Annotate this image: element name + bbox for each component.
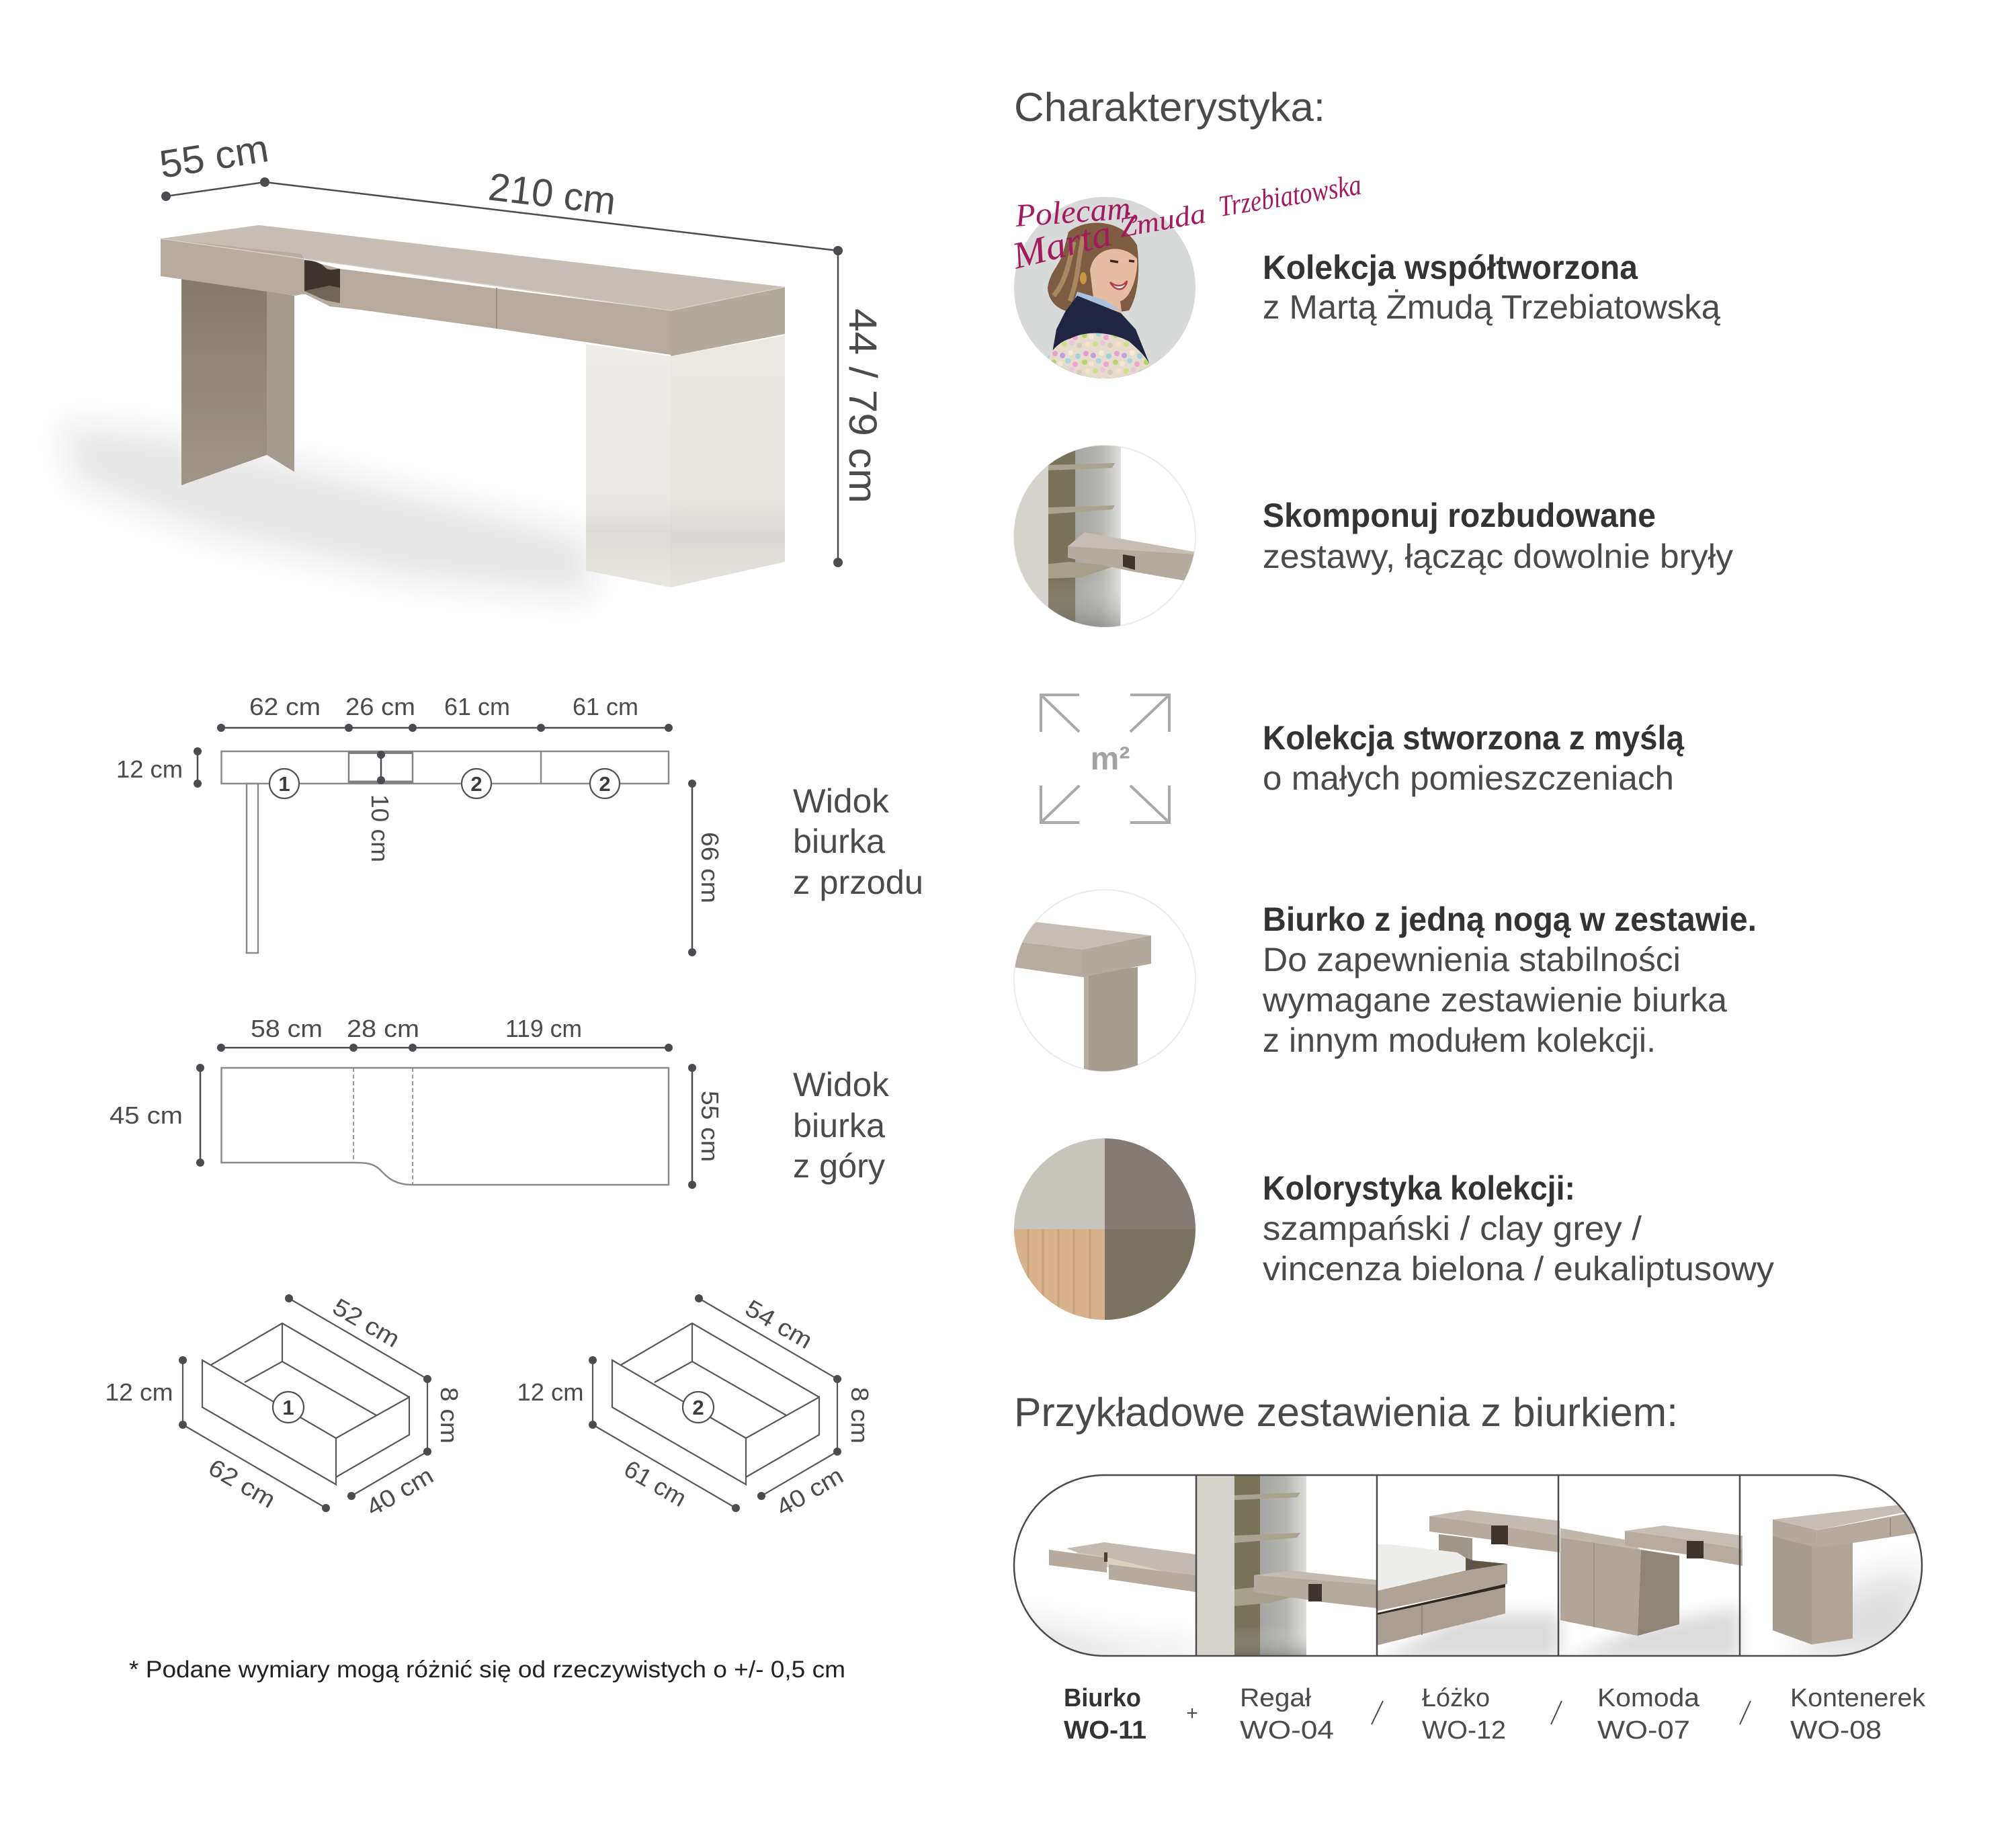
desk top <box>161 225 785 356</box>
drawer dimension lines <box>589 1294 841 1512</box>
top view labels: 119 cm <box>505 1015 582 1042</box>
caption: front view <box>793 782 923 901</box>
text: small rooms <box>1263 719 1685 797</box>
text: collaboration <box>1263 249 1720 326</box>
eyes <box>1110 261 1134 262</box>
drawer badge: 2 <box>692 1396 704 1419</box>
panel: container <box>1773 1505 1922 1660</box>
caption: front view: Widok <box>793 782 890 820</box>
drawer 2 diagram <box>517 1294 874 1521</box>
top view labels: 28 cm <box>347 1015 419 1042</box>
label: Regał <box>1240 1684 1334 1745</box>
width labels: 61 cm <box>444 693 510 720</box>
text: compose sets: Skomponuj rozbudowane <box>1263 497 1656 534</box>
label: Kontenerek <box>1790 1684 1926 1745</box>
drawer labels: 62 cm <box>204 1453 280 1513</box>
measure: 66 cm <box>688 780 696 956</box>
drawer labels: 12 cm <box>517 1378 583 1406</box>
label: Biurko <box>1064 1684 1146 1745</box>
drawer labels: 8 cm <box>435 1387 463 1444</box>
label: Komoda: Komoda <box>1597 1684 1700 1712</box>
drawer badge 2 second <box>590 769 620 798</box>
text: small rooms: Kolekcja stworzona z myślą <box>1263 719 1685 757</box>
drawer labels <box>517 1294 874 1521</box>
hair <box>1048 222 1138 315</box>
drawer dimension lines <box>179 1294 431 1512</box>
pill outline and dividers <box>1014 1475 1922 1656</box>
label: Kontenerek: WO-08 <box>1790 1716 1882 1745</box>
label: Komoda <box>1597 1684 1700 1745</box>
panel: desk with open drawers <box>1030 1542 1195 1655</box>
text: collaboration: z Martą Żmudą Trzebiatowską <box>1263 288 1720 326</box>
text: colours: szampański / clay grey / <box>1263 1210 1642 1247</box>
icon: m2 arrows <box>1041 695 1169 823</box>
label: Regał: WO-04 <box>1240 1716 1334 1745</box>
icon: single leg circle <box>1008 890 1195 1075</box>
text: one leg <box>1262 901 1757 1059</box>
icon: shelving and desk circle <box>1011 444 1195 632</box>
drawer labels <box>105 1292 463 1521</box>
text: small rooms: o małych pomieszczeniach <box>1263 759 1674 797</box>
text: collaboration: Kolekcja współtworzona <box>1263 249 1638 286</box>
measure: 45 cm <box>196 1064 204 1167</box>
front view drawing <box>116 693 724 956</box>
width labels: 26 cm <box>345 693 415 720</box>
label: Łóżko <box>1422 1684 1506 1745</box>
text: one leg: z innym modułem kolekcji. <box>1263 1021 1656 1059</box>
panel: shelving unit <box>1196 1472 1377 1660</box>
drawer box <box>612 1323 819 1485</box>
width labels: 10 cm <box>366 794 394 862</box>
label: Biurko: WO-11 <box>1064 1716 1146 1745</box>
footnote: * Podane wymiary mogą różnić się od rzeczywistych o +/- 0,5 cm <box>129 1657 845 1683</box>
text: one leg: Biurko z jedną nogą w zestawie. <box>1263 901 1757 938</box>
heading: example sets: Przykładowe zestawienia z biurkiem: <box>1014 1390 1678 1435</box>
drawer badge 2: 2 <box>470 772 482 796</box>
label: Kontenerek: Kontenerek <box>1790 1684 1926 1712</box>
text: colours <box>1263 1169 1774 1288</box>
fold lines <box>353 1068 413 1185</box>
drawer labels: 61 cm <box>620 1454 691 1512</box>
signature: Trzebiatowska <box>1216 168 1363 223</box>
signature: Żmuda <box>1117 198 1208 244</box>
drawer badge <box>273 1392 304 1423</box>
pill of example sets <box>1008 1472 1922 1667</box>
top view labels: 45 cm <box>110 1101 183 1129</box>
text: colours: vincenza bielona / eukaliptusowy <box>1263 1250 1774 1288</box>
drawer labels: 40 cm <box>362 1461 438 1521</box>
dimension line: top widths <box>217 1044 673 1052</box>
drawer labels: 12 cm <box>105 1378 173 1406</box>
drawer 1 diagram <box>105 1292 463 1521</box>
signature <box>1007 168 1363 278</box>
drawer badge 1: 1 <box>278 772 290 796</box>
product labels <box>1064 1684 1926 1745</box>
bouquet <box>1047 333 1150 378</box>
label: Łóżko: Łóżko <box>1422 1684 1490 1712</box>
caption: top view: Widok <box>793 1066 890 1103</box>
text: one leg: wymagane zestawienie biurka <box>1262 981 1727 1019</box>
top view drawing <box>110 1015 724 1189</box>
text: one leg: Do zapewnienia stabilności <box>1263 941 1681 978</box>
width labels: 66 cm <box>696 832 724 903</box>
dimension line: widths <box>217 724 673 732</box>
label: 44 / 79 cm: 44 / 79 cm <box>841 308 884 503</box>
text: colours: Kolorystyka kolekcji: <box>1263 1169 1575 1207</box>
caption: top view <box>793 1066 890 1185</box>
top view labels: 58 cm <box>251 1015 323 1042</box>
caption: top view: biurka <box>793 1107 885 1144</box>
label: 55 cm: 55 cm <box>157 126 271 187</box>
earring <box>1080 272 1087 284</box>
drawer badge: 1 <box>282 1396 294 1419</box>
caption: top view: z góry <box>793 1147 885 1185</box>
white pedestal <box>586 335 785 587</box>
slashes <box>1372 1701 1751 1724</box>
product render: desk with dimensions <box>60 126 884 598</box>
blouse collar <box>1075 292 1121 310</box>
width labels: 12 cm <box>116 755 183 783</box>
drawer badge <box>683 1392 714 1423</box>
signature: Polecam, <box>1013 190 1140 234</box>
label: Łóżko: WO-12 <box>1422 1716 1506 1745</box>
plus sign: + <box>1186 1702 1198 1724</box>
neck and face <box>1090 249 1137 316</box>
navy jacket <box>1048 296 1150 383</box>
dimension lines <box>161 177 843 567</box>
label: Biurko: Biurko <box>1064 1684 1141 1712</box>
caption: front view: biurka <box>793 823 885 860</box>
drawer box <box>202 1323 409 1485</box>
drawer badge 2 second: 2 <box>599 772 611 796</box>
desk left leg <box>181 279 294 485</box>
floor shadow <box>60 423 591 598</box>
drawer labels: 40 cm <box>771 1461 848 1521</box>
panel: bed <box>1378 1510 1560 1660</box>
icon: colour swatches <box>1014 1138 1195 1320</box>
icon: m2 arrows: m² <box>1091 741 1130 777</box>
drawer labels: 8 cm <box>846 1387 874 1444</box>
width labels: 61 cm <box>573 693 638 720</box>
top view labels <box>110 1015 724 1162</box>
measure: 10 cm <box>377 751 385 784</box>
label: Regał: Regał <box>1240 1684 1312 1712</box>
label: Komoda: WO-07 <box>1597 1716 1690 1745</box>
drawer labels: 54 cm <box>741 1294 817 1354</box>
text: compose sets: zestawy, łącząc dowolnie bryły <box>1263 538 1733 575</box>
drawer labels: 52 cm <box>328 1292 405 1353</box>
signature: Marta <box>1007 212 1116 278</box>
drawer badge 1 <box>269 769 299 798</box>
text: compose sets <box>1263 497 1733 575</box>
top view labels: 55 cm <box>696 1091 724 1162</box>
smile <box>1110 281 1127 289</box>
heading: Charakterystyka: Charakterystyka: <box>1014 85 1325 130</box>
portrait photo circle <box>1007 168 1363 383</box>
width labels <box>116 693 724 903</box>
panel: chest of drawers <box>1560 1526 1742 1660</box>
top view outline <box>222 1068 669 1185</box>
measure: 55 cm <box>688 1064 696 1189</box>
caption: front view: z przodu <box>793 864 923 901</box>
width labels: 62 cm <box>249 693 321 720</box>
drawer badge 2 <box>462 769 491 798</box>
drawer cutout <box>304 260 340 303</box>
label: 210 cm: 210 cm <box>486 165 618 223</box>
desk top outline and leg <box>222 751 669 953</box>
measure: 12 cm <box>194 747 202 788</box>
